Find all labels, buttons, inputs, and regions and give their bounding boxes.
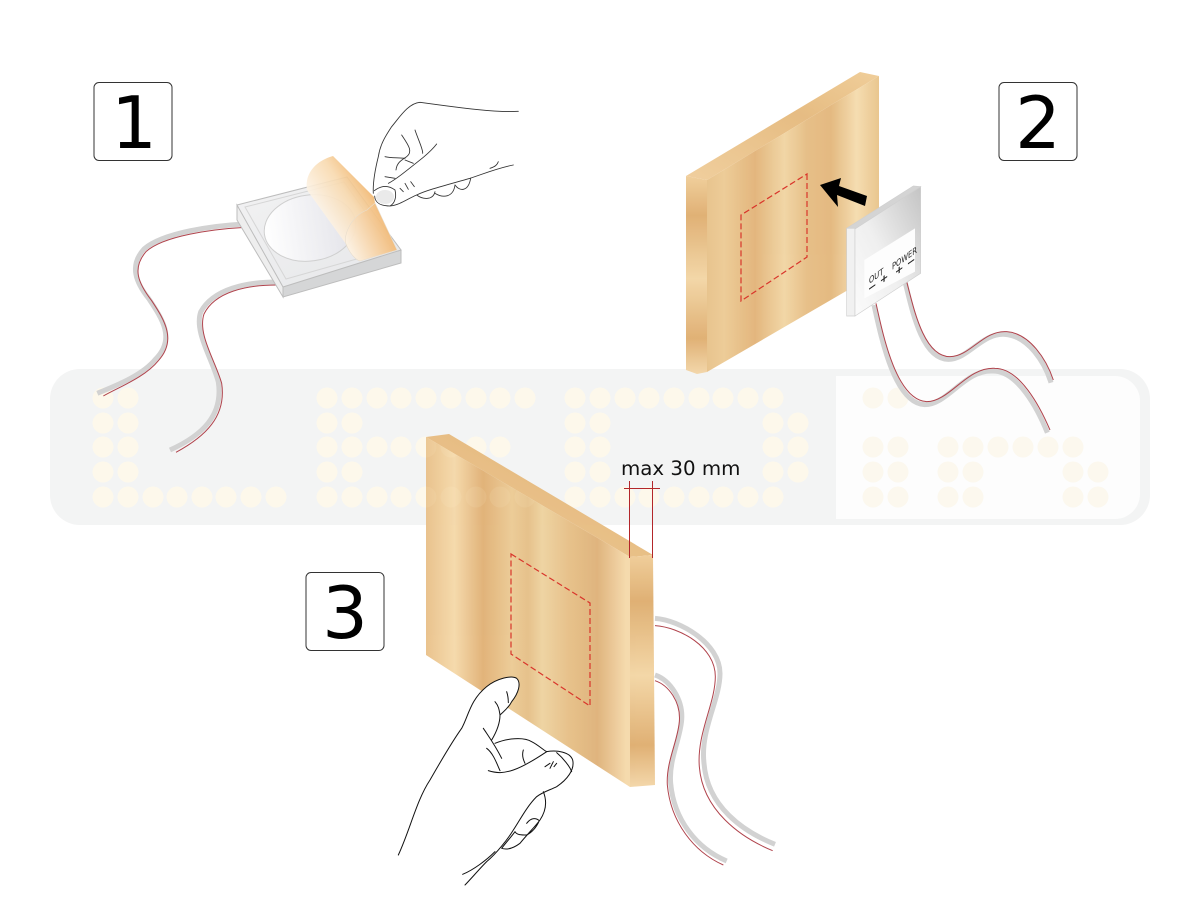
step 3 number badge: 3 xyxy=(322,571,368,655)
arrow toward board xyxy=(820,178,867,207)
dimension lines xyxy=(624,481,660,558)
power terminal label: + − xyxy=(895,253,915,279)
output terminal label: OUT xyxy=(869,266,884,287)
thickness dimension xyxy=(621,457,740,558)
sign dots showing through board xyxy=(479,488,490,507)
module wires xyxy=(874,282,1053,433)
output terminal label: − + xyxy=(868,270,888,296)
step 3 number badge xyxy=(306,571,384,655)
step 1 number badge: 1 xyxy=(111,81,157,165)
thumb tip shading xyxy=(376,190,394,204)
hand peeling film xyxy=(373,102,518,206)
step 1 illustration xyxy=(97,102,518,452)
step 2 number badge xyxy=(999,81,1077,165)
hand pressing board xyxy=(398,677,573,885)
step 1 wires xyxy=(97,224,277,452)
step 2 number badge: 2 xyxy=(1015,81,1061,165)
dashed placement outline xyxy=(741,174,807,301)
dimension label: max 30 mm xyxy=(621,457,740,480)
LED sign background panel xyxy=(50,369,1150,525)
dashed module outline xyxy=(511,554,590,706)
peeled protective film xyxy=(307,156,397,261)
wall board xyxy=(686,72,879,374)
step 3 illustration xyxy=(398,434,775,885)
power terminal label: POWER xyxy=(892,245,917,273)
step 2 illustration xyxy=(686,72,1053,433)
rear wires xyxy=(655,618,775,865)
mounted board xyxy=(426,434,655,787)
step 1 number badge xyxy=(94,81,172,165)
driver module xyxy=(847,186,921,316)
LED module xyxy=(237,177,401,297)
